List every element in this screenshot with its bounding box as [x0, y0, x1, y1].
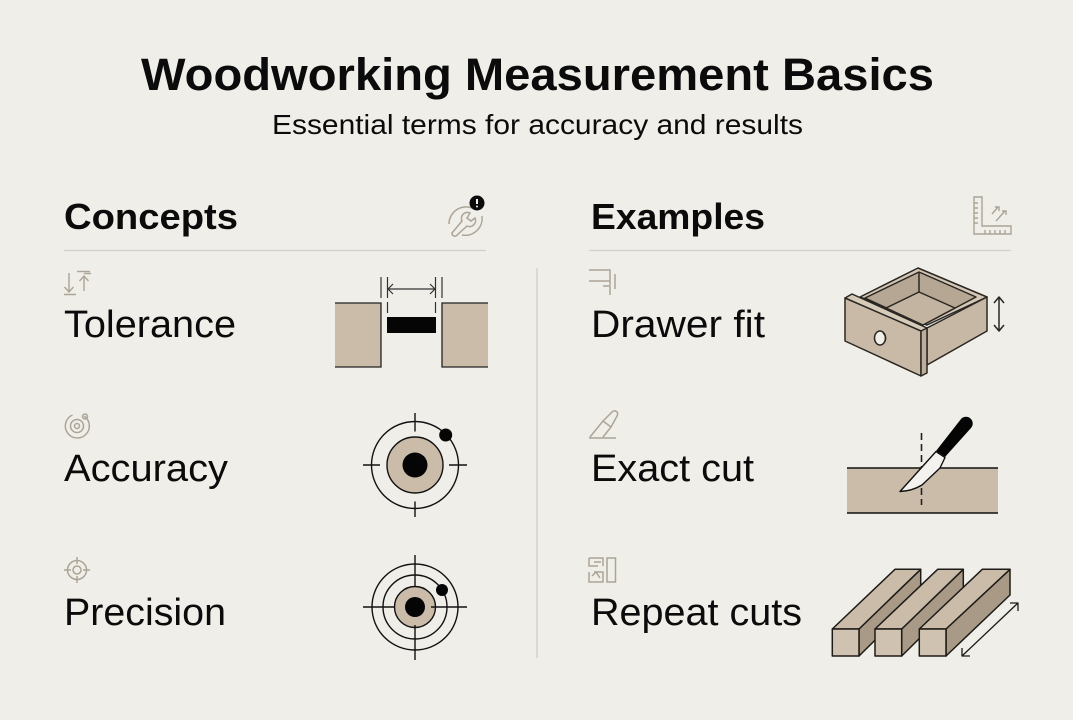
- row: drawer fit: [589, 268, 1004, 376]
- row: accuracy: [64, 413, 467, 517]
- subtitle: Essential terms for accuracy and results: [272, 109, 803, 140]
- icon: marking knife: [589, 411, 618, 438]
- diagram: tolerance gap: [335, 277, 488, 367]
- label: accuracy: Accuracy: [64, 448, 228, 490]
- diagram: wood beams: [832, 569, 1018, 656]
- heading: examples: Examples: [591, 196, 765, 237]
- icon: accuracy ring: [65, 414, 89, 438]
- icon: precision crosshair: [64, 557, 90, 583]
- icon: joint: [589, 270, 615, 295]
- icon: tolerance arrows: [64, 272, 91, 294]
- heading: concepts: Concepts: [64, 196, 238, 237]
- title: Woodworking Measurement Basics: [141, 49, 934, 100]
- label: drawer fit: Drawer fit: [591, 304, 765, 346]
- label: repeat cuts: Repeat cuts: [591, 592, 802, 634]
- icon: repeat blocks: [589, 558, 616, 582]
- diagram: precision target: [363, 555, 467, 660]
- icon: wrench alert: [449, 196, 484, 236]
- panel: examples: [589, 196, 1018, 656]
- row: tolerance: [64, 272, 488, 367]
- label: precision: Precision: [64, 592, 226, 634]
- diagram: drawer: [845, 268, 1004, 376]
- panel: concepts: [64, 196, 488, 660]
- diagram: knife on board: [847, 417, 998, 513]
- icon: square ruler: [974, 197, 1011, 234]
- label: tolerance: Tolerance: [64, 304, 236, 346]
- label: exact cut: Exact cut: [591, 448, 754, 490]
- diagram: accuracy target: [363, 413, 467, 517]
- row: exact cut: [589, 411, 998, 513]
- row: precision: [64, 555, 467, 660]
- row: repeat cuts: [589, 558, 1018, 656]
